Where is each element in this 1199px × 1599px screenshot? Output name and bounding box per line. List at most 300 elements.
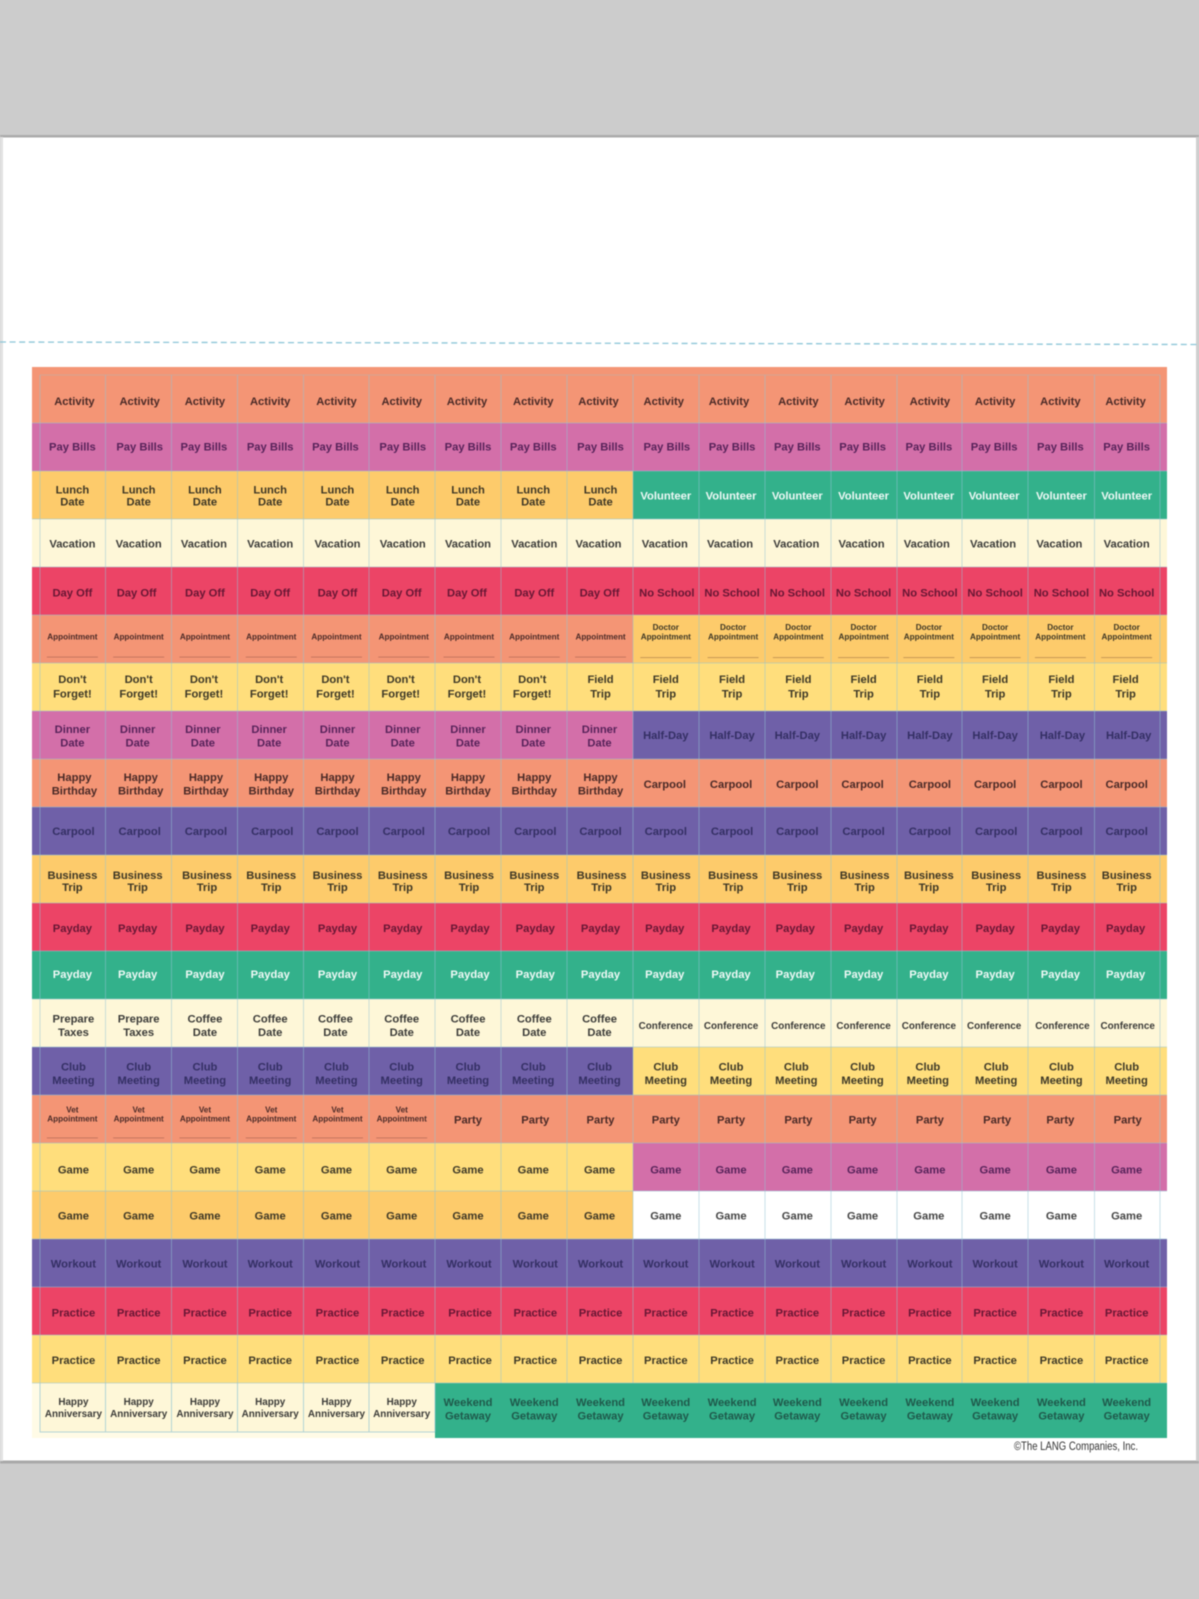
row 11: Business Trip: Trip [261, 882, 282, 894]
Doctor Appointment tags: Doctor [982, 623, 1009, 632]
Conference tags: Conference [836, 1021, 891, 1032]
row 19: Workout: Workout [182, 1258, 228, 1270]
row 5: Day Off and No School: Day Off [52, 587, 93, 599]
Game yellow tags: Game [123, 1165, 154, 1177]
row 13: Payday on green: Payday [1106, 969, 1146, 981]
Party tags: Party [916, 1115, 945, 1127]
row 4: Vacation: Vacation [116, 539, 162, 551]
Appointment tags [32, 615, 633, 663]
row 10: Carpool [32, 807, 1167, 855]
Game white tags: Game [1111, 1210, 1142, 1222]
Conference tags: Conference [771, 1021, 826, 1032]
Volunteer tags: Volunteer [1101, 491, 1153, 503]
row 9: Happy Birthday and Carpool: Birthday [445, 785, 491, 797]
row 4: Vacation: Vacation [181, 539, 227, 551]
Lunch Date tags: Date [127, 497, 151, 509]
Party tags: Party [1114, 1115, 1142, 1127]
row 5: Day Off and No School: Day Off [514, 587, 554, 599]
Weekend Getaway tags: Weekend [641, 1397, 690, 1409]
Game pink tags [633, 1143, 1167, 1191]
Weekend Getaway tags: Getaway [907, 1410, 954, 1422]
row 20: Practice on red: Practice [908, 1307, 952, 1319]
row 11: Business Trip: Trip [854, 882, 875, 894]
row 12: Payday on red: Payday [776, 923, 816, 935]
Game pink tags: Game [1046, 1165, 1077, 1177]
Dinner Date tags: Date [325, 737, 350, 749]
Weekend Getaway tags: Weekend [708, 1397, 757, 1409]
row 21: Practice on yellow: Practice [1105, 1355, 1148, 1367]
Weekend Getaway tags: Weekend [971, 1397, 1020, 1409]
Happy Anniversary tags [32, 1383, 435, 1438]
Club Meeting yellow tags: Meeting [645, 1075, 687, 1087]
Game yellow tags: Game [189, 1165, 221, 1177]
Dinner Date tags: Date [521, 737, 545, 749]
row 11: Business Trip: Trip [723, 882, 744, 894]
row 20: Practice on red [32, 1287, 1167, 1335]
Lunch Date tags: Lunch [321, 484, 354, 496]
row 7: Don't Forget and Field Trip: Trip [788, 688, 809, 700]
row 20: Practice on red: Practice [117, 1307, 160, 1319]
row 19: Workout: Workout [116, 1258, 162, 1270]
row 9: Happy Birthday and Carpool: Happy [451, 772, 486, 784]
row 21: Practice on yellow: Practice [248, 1355, 292, 1367]
row 4: Vacation: Vacation [1036, 539, 1083, 551]
Lunch Date tags [32, 471, 633, 519]
Club Meeting yellow tags: Meeting [710, 1075, 752, 1087]
row 2: Pay Bills: Pay Bills [839, 442, 886, 454]
Lunch Date tags: Lunch [122, 484, 156, 496]
Game white tags: Game [650, 1210, 681, 1222]
Conference tags: Conference [704, 1021, 759, 1032]
row 14: Prepare Taxes, Coffee Date and Conference: Coffee [451, 1014, 485, 1026]
row 1: Activity [32, 367, 1167, 423]
Club Meeting purple tags: Club [456, 1062, 481, 1074]
row 14: Prepare Taxes, Coffee Date and Conference: Date [390, 1027, 414, 1039]
row 7: Don't Forget and Field Trip: Trip [985, 688, 1006, 700]
row 5: Day Off and No School: No School [836, 587, 891, 599]
row 14: Prepare Taxes, Coffee Date and Conference: Date [258, 1027, 282, 1039]
row 15: Club Meeting [32, 1047, 1167, 1095]
Weekend Getaway tags: Getaway [841, 1410, 887, 1422]
row 12: Payday on red: Payday [118, 923, 158, 935]
Lunch Date tags: Date [588, 497, 613, 509]
row 4: Vacation: Vacation [314, 539, 361, 551]
Weekend Getaway tags: Weekend [905, 1397, 955, 1409]
Lunch Date tags: Date [60, 497, 85, 509]
row 17: Game on yellow and pink [32, 1143, 1167, 1191]
row 12: Payday on red: Payday [516, 923, 556, 935]
row 7: Don't Forget and Field Trip: Trip [722, 688, 742, 700]
row 7: Don't Forget and Field Trip: Field [1048, 674, 1075, 686]
row 20: Practice on red: Practice [1040, 1307, 1083, 1319]
row 10: Carpool: Carpool [251, 826, 293, 838]
Party tags: Party [521, 1115, 550, 1127]
row 4: Vacation: Vacation [1104, 539, 1150, 551]
row 1: Activity: Activity [910, 396, 951, 408]
row 5: Day Off and No School: No School [639, 587, 695, 599]
row 11: Business Trip [32, 855, 1167, 903]
row 11: Business Trip: Business [313, 870, 362, 882]
row 19: Workout: Workout [446, 1258, 492, 1270]
row 10: Carpool: Carpool [909, 826, 951, 838]
Half-Day tags: Half-Day [709, 730, 756, 742]
row 11: Business Trip: Business [971, 870, 1021, 882]
row 7: Don't Forget and Field Trip: Don't [125, 674, 153, 686]
row 12: Payday on red: Payday [318, 923, 358, 935]
row 7: Don't Forget and Field Trip: Don't [518, 674, 547, 686]
Weekend Getaway tags: Weekend [444, 1397, 493, 1409]
Game pink tags: Game [782, 1165, 813, 1177]
row 13: Payday on green: Payday [711, 969, 751, 981]
row 2: Pay Bills: Pay Bills [1103, 442, 1150, 454]
row 2: Pay Bills: Pay Bills [643, 442, 690, 454]
Vet Appointment tags: Appointment [377, 1115, 427, 1124]
row 7: Don't Forget and Field Trip: Forget! [448, 688, 486, 700]
row 7: Don't Forget and Field Trip: Trip [1051, 688, 1072, 700]
row 11: Business Trip: Business [47, 870, 97, 882]
Doctor Appointment tags: Appointment [773, 632, 824, 641]
row 9: Happy Birthday and Carpool: Happy [189, 772, 224, 784]
Weekend Getaway tags: Getaway [774, 1410, 821, 1422]
row 3: Lunch Date and Volunteer [32, 471, 1167, 519]
row 5: Day Off and No School: No School [1099, 587, 1154, 599]
row 1: Activity: Activity [316, 396, 357, 408]
Dinner Date tags: Date [257, 737, 281, 749]
Half-Day tags [633, 711, 1167, 759]
row 11: Business Trip: Trip [327, 882, 348, 894]
row 20: Practice on red: Practice [579, 1307, 622, 1319]
Game gold tags: Game [518, 1210, 549, 1222]
row 11: Business Trip: Business [378, 870, 428, 882]
row 9: Happy Birthday and Carpool: Birthday [52, 785, 98, 797]
row 11: Business Trip: Trip [127, 882, 148, 894]
Appointment tags: Appointment [509, 632, 560, 641]
Game gold tags: Game [189, 1210, 221, 1222]
Lunch Date tags: Date [456, 497, 480, 509]
Game yellow tags: Game [584, 1165, 615, 1177]
row 9: Happy Birthday and Carpool: Carpool [644, 779, 686, 791]
row 7: Don't Forget and Field Trip: Field [851, 674, 877, 686]
row 7: Don't Forget and Field Trip: Forget! [316, 688, 355, 700]
row 21: Practice on yellow: Practice [448, 1355, 492, 1367]
Weekend Getaway tags: Weekend [1037, 1397, 1086, 1409]
row 20: Practice on red: Practice [842, 1307, 885, 1319]
Party tags: Party [849, 1115, 877, 1127]
Dinner Date tags: Dinner [55, 724, 91, 736]
row 14: Prepare Taxes, Coffee Date and Conference: Taxes [58, 1027, 89, 1039]
row 21: Practice on yellow: Practice [1040, 1355, 1083, 1367]
row 2: Pay Bills: Pay Bills [181, 442, 227, 454]
Volunteer tags: Volunteer [706, 491, 757, 503]
row 13: Payday on green: Payday [976, 969, 1016, 981]
Game gold tags [32, 1191, 633, 1239]
row 1: Activity: Activity [975, 396, 1016, 408]
row 20: Practice on red: Practice [316, 1307, 359, 1319]
Happy Anniversary tags: Anniversary [176, 1409, 234, 1420]
row 11: Business Trip: Trip [392, 882, 413, 894]
row 1: Activity: Activity [709, 396, 750, 408]
row 21: Practice on yellow: Practice [973, 1355, 1017, 1367]
Game white tags [633, 1191, 1167, 1239]
Happy Anniversary tags: Anniversary [308, 1409, 366, 1420]
row 9: Happy Birthday and Carpool: Happy [57, 772, 92, 784]
row 4: Vacation: Vacation [904, 539, 950, 551]
Party tags: Party [717, 1115, 746, 1127]
row 2: Pay Bills: Pay Bills [312, 442, 359, 454]
row 14: Prepare Taxes, Coffee Date and Conference: Coffee [517, 1014, 552, 1026]
Club Meeting purple tags [32, 1047, 633, 1095]
Happy Anniversary tags: Happy [58, 1397, 89, 1408]
Club Meeting yellow tags: Club [1114, 1062, 1139, 1074]
row 21: Practice on yellow [32, 1335, 1167, 1383]
Happy Anniversary tags: Anniversary [110, 1409, 168, 1420]
Game yellow tags: Game [518, 1165, 549, 1177]
Club Meeting purple tags: Meeting [578, 1075, 621, 1087]
Game gold tags: Game [123, 1210, 154, 1222]
Doctor Appointment tags: Doctor [1047, 623, 1074, 632]
row 6: Appointment and Doctor Appointment [32, 615, 1167, 663]
Game gold tags: Game [584, 1210, 615, 1222]
Volunteer tags: Volunteer [969, 491, 1020, 503]
Appointment tags: Appointment [246, 632, 297, 641]
row 19: Workout: Workout [248, 1258, 293, 1270]
Happy Anniversary tags: Anniversary [373, 1409, 431, 1420]
row 2: Pay Bills: Pay Bills [247, 442, 294, 454]
Doctor Appointment tags: Appointment [1102, 632, 1152, 641]
row 9: Happy Birthday and Carpool: Birthday [183, 785, 229, 797]
row 13: Payday on green: Payday [516, 969, 556, 981]
row 14: Prepare Taxes, Coffee Date and Conference: Prepare [53, 1014, 94, 1026]
row 14: Prepare Taxes, Coffee Date and Conference: Taxes [123, 1027, 154, 1039]
row 5: Day Off and No School: Day Off [382, 587, 422, 599]
row 5: Day Off and No School: Day Off [185, 587, 225, 599]
Club Meeting yellow tags: Meeting [841, 1075, 884, 1087]
row 12: Payday on red: Payday [53, 923, 93, 935]
row 21: Practice on yellow: Practice [316, 1355, 359, 1367]
row 21: Practice on yellow: Practice [381, 1355, 425, 1367]
Dinner Date tags [32, 711, 633, 759]
row 11: Business Trip: Business [904, 870, 954, 882]
row 12: Payday on red: Payday [450, 923, 490, 935]
Dinner Date tags: Date [191, 737, 215, 749]
Doctor Appointment tags: Appointment [970, 632, 1021, 641]
row 12: Payday on red: Payday [1041, 923, 1081, 935]
row 2: Pay Bills: Pay Bills [379, 442, 426, 454]
Party tags: Party [1046, 1115, 1075, 1127]
row 4: Vacation: Vacation [642, 539, 688, 551]
row 7: Don't Forget and Field Trip: Forget! [250, 688, 288, 700]
row 10: Carpool: Carpool [975, 826, 1017, 838]
Party tags: Party [454, 1115, 483, 1127]
Lunch Date tags: Lunch [386, 484, 420, 496]
row 13: Payday on green: Payday [450, 969, 490, 981]
tag grid lines [32, 375, 1167, 1432]
row 11: Business Trip: Business [641, 870, 691, 882]
row 10: Carpool: Carpool [185, 826, 227, 838]
Club Meeting yellow tags: Meeting [1105, 1075, 1148, 1087]
Dinner Date tags: Dinner [516, 724, 552, 736]
row 7: Don't Forget and Field Trip: Don't [190, 674, 218, 686]
Club Meeting purple tags: Club [192, 1062, 218, 1074]
row 21: Practice on yellow: Practice [908, 1355, 952, 1367]
Game pink tags: Game [980, 1165, 1011, 1177]
row 14: Prepare Taxes, Coffee Date and Conference: Coffee [188, 1014, 222, 1026]
Conference tags: Conference [967, 1021, 1022, 1032]
Club Meeting yellow tags: Meeting [975, 1075, 1017, 1087]
Lunch Date tags: Date [258, 497, 282, 509]
row 13: Payday on green: Payday [1041, 969, 1081, 981]
row 7: Don't Forget and Field Trip: Trip [853, 688, 874, 700]
row 7: Don't Forget and Field Trip: Forget! [185, 688, 223, 700]
Dinner Date tags: Dinner [185, 724, 221, 736]
Club Meeting yellow tags: Meeting [907, 1075, 949, 1087]
Vet Appointment tags [47, 1105, 427, 1138]
Appointment tags: Appointment [444, 632, 494, 641]
Volunteer tags: Volunteer [772, 491, 823, 503]
Club Meeting purple tags: Meeting [184, 1075, 226, 1087]
row 12: Payday on red [32, 903, 1167, 951]
row 2: Pay Bills: Pay Bills [116, 442, 163, 454]
Game white tags: Game [715, 1210, 747, 1222]
row 5: Day Off and No School: No School [704, 587, 760, 599]
Happy Anniversary tags: Happy [190, 1397, 221, 1408]
row 13: Payday on green: Payday [185, 969, 225, 981]
row 20: Practice on red: Practice [52, 1307, 95, 1319]
Dinner Date tags: Dinner [582, 724, 618, 736]
row 9: Happy Birthday and Carpool: Happy [517, 772, 552, 784]
Vet Appointment tags: Vet [396, 1105, 408, 1114]
row 11: Business Trip: Business [444, 870, 494, 882]
row 11: Business Trip: Trip [524, 882, 545, 894]
row 7: Don't Forget and Field Trip: Don't [58, 674, 87, 686]
row 7: Don't Forget and Field Trip: Field [917, 674, 943, 686]
row 19: Workout: Workout [578, 1258, 623, 1270]
Doctor Appointment tags: Doctor [1114, 623, 1141, 632]
row 19: Workout: Workout [315, 1258, 360, 1270]
Lunch Date tags: Lunch [584, 484, 618, 496]
row 19: Workout: Workout [709, 1258, 755, 1270]
row 11: Business Trip: Trip [986, 882, 1007, 894]
Dinner Date tags: Date [456, 737, 480, 749]
row 12: Payday on red: Payday [185, 923, 225, 935]
row 8: Dinner Date and Half-Day [32, 711, 1167, 759]
row 7: Don't Forget and Field Trip: Forget! [53, 688, 92, 700]
row 1: Activity: Activity [844, 396, 886, 408]
row 12: Payday on red: Payday [251, 923, 291, 935]
Appointment tags: Appointment [180, 632, 230, 641]
row 13: Payday on green [32, 951, 1167, 999]
Volunteer tags: Volunteer [1036, 491, 1087, 503]
row 20: Practice on red: Practice [1105, 1307, 1148, 1319]
row 14: Prepare Taxes, Coffee Date and Conference: Date [587, 1027, 612, 1039]
row 13: Payday on green: Payday [645, 969, 685, 981]
Appointment tags: Appointment [47, 632, 98, 641]
row 11: Business Trip: Trip [787, 882, 808, 894]
row 7: Don't Forget and Field Trip: Forget! [119, 688, 158, 700]
row 11: Business Trip: Trip [591, 882, 612, 894]
Club Meeting purple tags: Club [126, 1062, 151, 1074]
Doctor Appointment tags: Doctor [653, 623, 680, 632]
Happy Anniversary tags: Anniversary [242, 1409, 299, 1420]
Volunteer tags: Volunteer [838, 491, 890, 503]
row 2: Pay Bills: Pay Bills [1037, 442, 1084, 454]
row 19: Workout: Workout [381, 1258, 427, 1270]
row 4: Vacation [32, 519, 1167, 567]
Dinner Date tags: Date [587, 737, 612, 749]
row 9: Happy Birthday and Carpool: Carpool [974, 779, 1016, 791]
Weekend Getaway tags: Getaway [577, 1410, 624, 1422]
row 14: Prepare Taxes, Coffee Date and Conference: Coffee [582, 1014, 617, 1026]
Vet Appointment tags: Vet [199, 1105, 211, 1114]
row 7: Don't Forget and Field Trip: Field [982, 674, 1008, 686]
Lunch Date tags: Date [391, 497, 415, 509]
row 19: Workout [32, 1239, 1167, 1287]
row 14: Prepare Taxes, Coffee Date and Conference: Date [193, 1027, 217, 1039]
Doctor Appointment tags: Doctor [720, 623, 747, 632]
Game pink tags: Game [650, 1165, 681, 1177]
Dinner Date tags: Date [60, 737, 85, 749]
Game gold tags: Game [452, 1210, 484, 1222]
Doctor Appointment tags: Appointment [838, 632, 889, 641]
row 20: Practice on red: Practice [381, 1307, 425, 1319]
Game gold tags: Game [255, 1210, 286, 1222]
row 19: Workout: Workout [907, 1258, 953, 1270]
Happy Anniversary tags: Happy [255, 1397, 286, 1408]
Half-Day tags: Half-Day [841, 730, 887, 742]
row 9: Happy Birthday and Carpool: Carpool [776, 779, 818, 791]
row 10: Carpool: Carpool [1040, 826, 1083, 838]
row 9: Happy Birthday and Carpool: Happy [583, 772, 618, 784]
Party tags: Party [652, 1115, 681, 1127]
row 2: Pay Bills: Pay Bills [709, 442, 755, 454]
Doctor Appointment tags: Appointment [641, 632, 691, 641]
Conference tags: Conference [1101, 1021, 1155, 1032]
Game gold tags: Game [386, 1210, 417, 1222]
Doctor Appointment tags: Doctor [785, 623, 812, 632]
Weekend Getaway tags: Getaway [643, 1410, 690, 1422]
row 4: Vacation: Vacation [247, 539, 293, 551]
Dinner Date tags: Date [391, 737, 415, 749]
row 11: Business Trip: Business [1102, 870, 1152, 882]
row 2: Pay Bills [32, 423, 1167, 471]
row 21: Practice on yellow: Practice [117, 1355, 160, 1367]
row 12: Payday on red: Payday [1106, 923, 1146, 935]
row 12: Payday on red: Payday [909, 923, 949, 935]
row 19: Workout: Workout [775, 1258, 820, 1270]
row 5: Day Off and No School: No School [967, 587, 1023, 599]
Volunteer tags [633, 471, 1167, 519]
row 10: Carpool: Carpool [842, 826, 885, 838]
Vet Appointment tags: Appointment [246, 1115, 297, 1124]
Doctor Appointment tags: Appointment [1035, 632, 1086, 641]
row 20: Practice on red: Practice [513, 1307, 557, 1319]
row 9: Happy Birthday and Carpool: Birthday [512, 785, 558, 797]
Club Meeting yellow tags: Club [719, 1062, 744, 1074]
row 4: Vacation: Vacation [707, 539, 753, 551]
row 10: Carpool: Carpool [711, 826, 753, 838]
row 11: Business Trip: Business [113, 870, 163, 882]
Game pink tags: Game [1111, 1165, 1142, 1177]
row 11: Business Trip: Business [772, 870, 822, 882]
Doctor Appointment tags: Appointment [904, 632, 954, 641]
Vet Appointment tags: Vet [331, 1105, 344, 1114]
row 7: Don't Forget and Field Trip: Trip [1115, 688, 1136, 700]
Club Meeting purple tags: Meeting [118, 1075, 160, 1087]
Lunch Date tags: Lunch [188, 484, 222, 496]
row 5: Day Off and No School: Day Off [447, 587, 487, 599]
Game white tags: Game [782, 1210, 813, 1222]
row 19: Workout: Workout [1039, 1258, 1084, 1270]
